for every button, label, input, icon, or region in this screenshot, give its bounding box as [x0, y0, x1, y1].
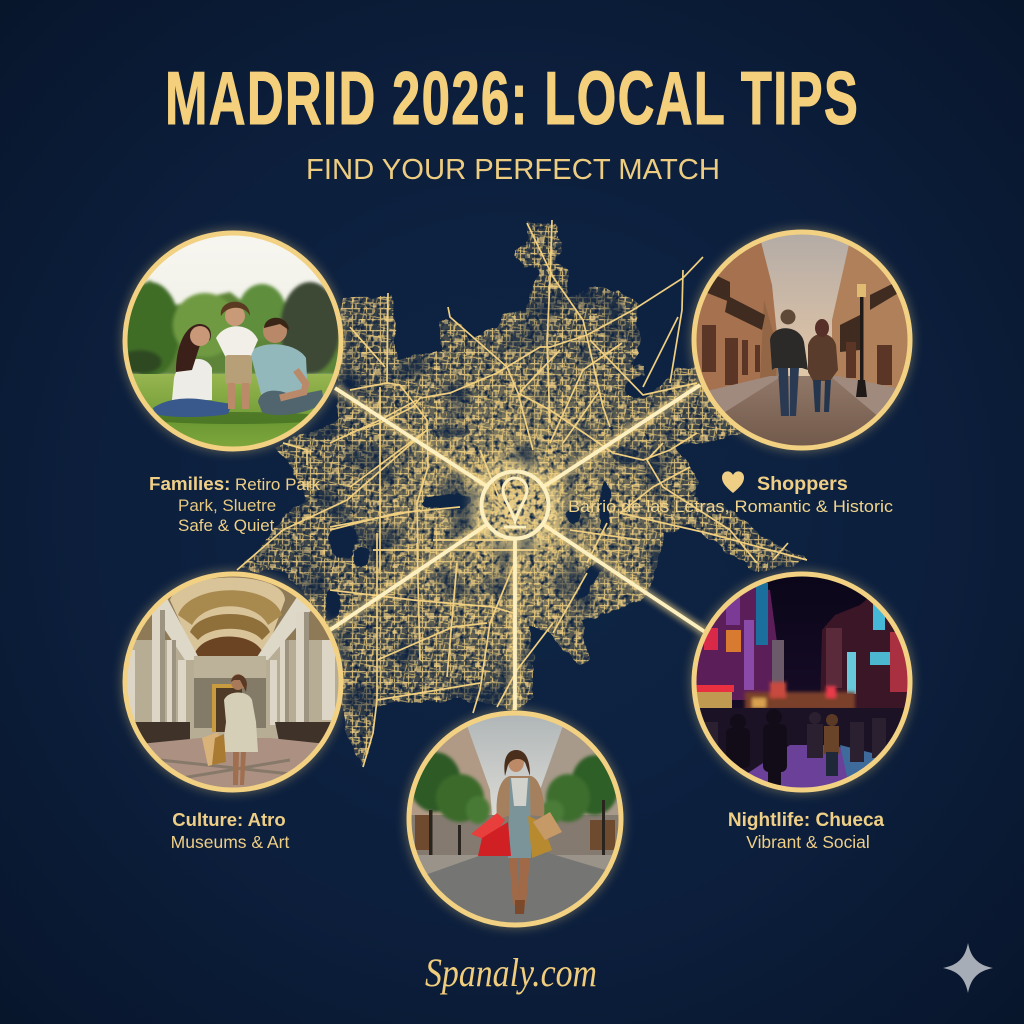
photo: romantic couple on street [690, 228, 916, 455]
label: families: Safe & Quiet [178, 516, 275, 535]
subtitle: FIND YOUR PERFECT MATCH [306, 154, 720, 186]
photo: nightlife neon street [690, 570, 916, 795]
label: culture: Museums & Art [171, 832, 289, 852]
icon: sparkle star [943, 943, 993, 993]
label: shoppers: Shoppers [757, 473, 848, 495]
label: nightlife [728, 810, 885, 852]
label: culture: Culture: Atro [172, 809, 286, 830]
city street map [236, 220, 808, 768]
photo: families in park [118, 229, 346, 458]
title: MADRID 2026: LOCAL TIPS [165, 56, 858, 140]
photo: culture museum interior [120, 570, 346, 795]
icon: heart [722, 471, 744, 493]
central hub pin icon [475, 465, 555, 545]
footer brand: Spanaly.com [425, 950, 597, 995]
label: families [149, 473, 321, 535]
label: shoppers [568, 471, 894, 516]
label: families: Retiro Park [235, 475, 321, 494]
label: families: Park, Sluetre [178, 496, 276, 515]
label: shoppers: Barrio de las Letras, Romantic & Historic [568, 497, 894, 516]
label: families: Families: [149, 473, 230, 494]
connector lines [330, 385, 705, 710]
label: nightlife: Nightlife: Chueca [728, 810, 885, 831]
label: culture [171, 809, 289, 852]
label: nightlife: Vibrant & Social [746, 832, 870, 852]
photo: shopper on tree-lined street [405, 709, 625, 929]
